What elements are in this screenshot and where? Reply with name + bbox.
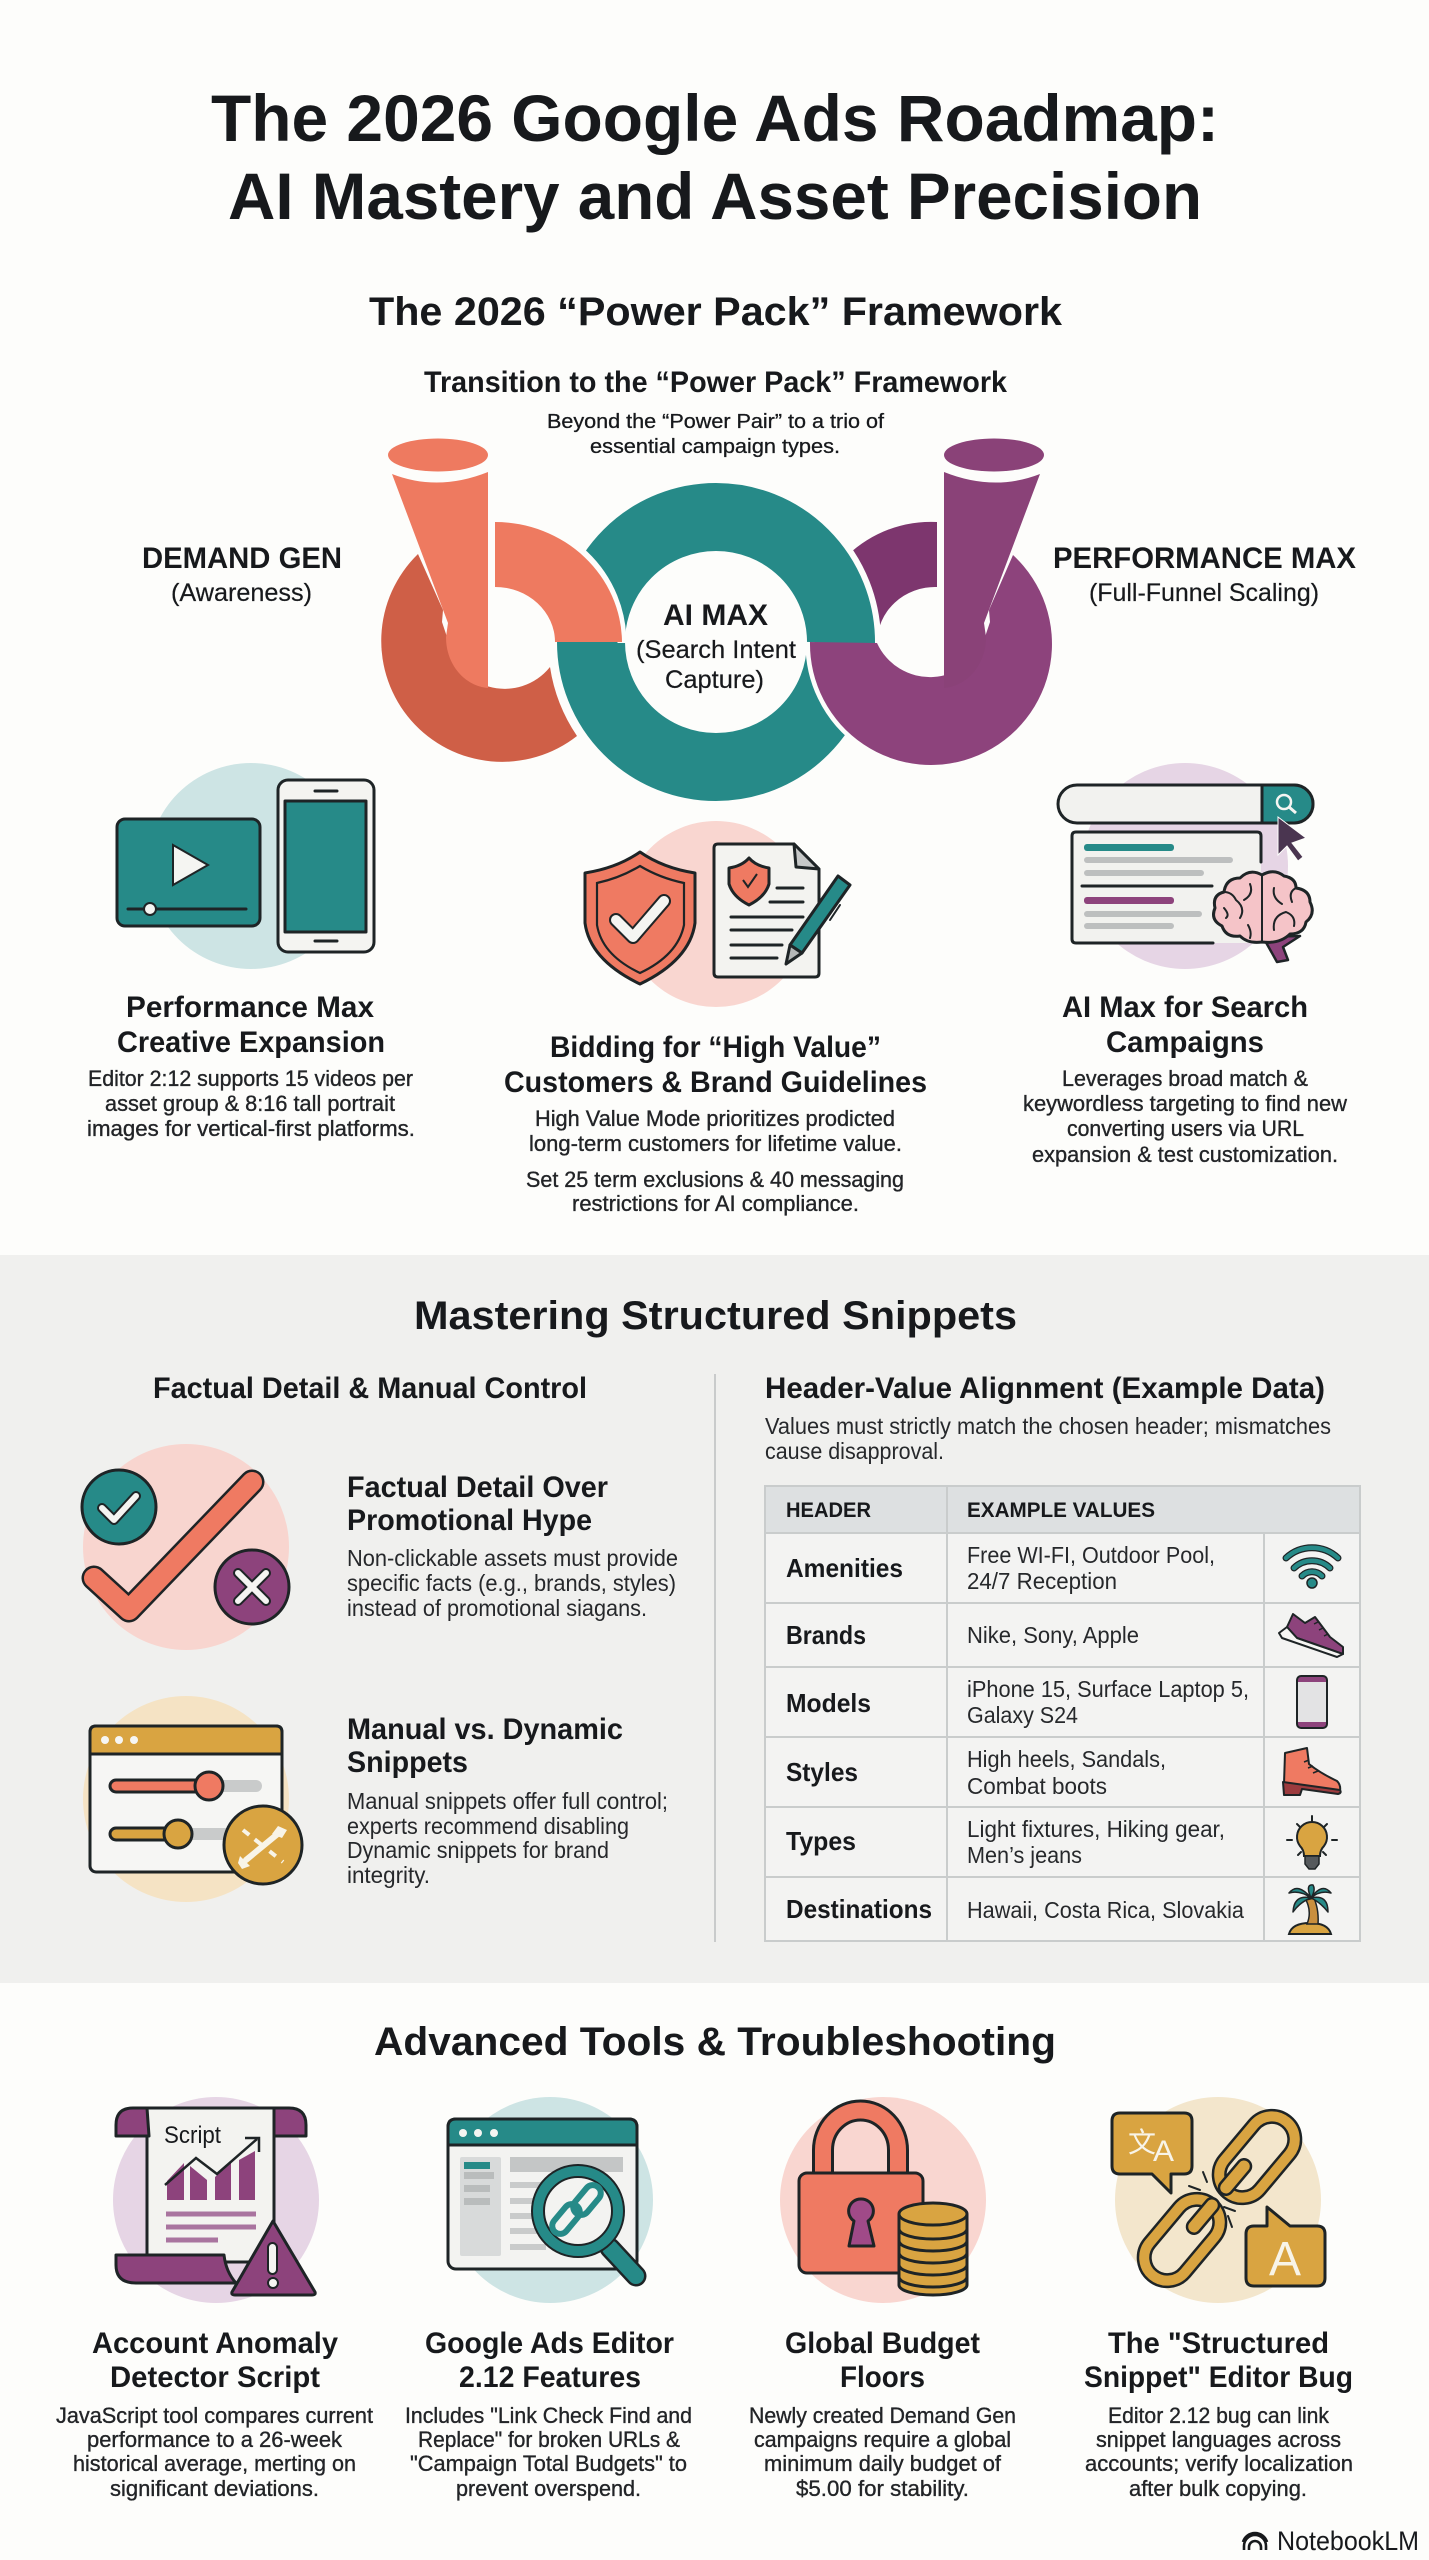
text: manual snippets: Dynamic snippets for brand bbox=[347, 1837, 609, 1863]
text: header value alignment bbox=[765, 1372, 1331, 1464]
item: factual detail over hype bbox=[82, 1444, 678, 1650]
table header row: EXAMPLE VALUES bbox=[967, 1499, 1155, 1522]
text: creative expansion: asset group & 8:16 tall portrait bbox=[105, 1091, 395, 1116]
text: editor bug: The "Structured bbox=[1108, 2327, 1329, 2360]
funnel: purple bbox=[944, 438, 1044, 688]
heading: structured snippets: Mastering Structured Snippets bbox=[414, 1294, 1017, 1338]
row: models: iPhone 15, Surface Laptop 5, bbox=[967, 1676, 1249, 1702]
text: AI max search: Campaigns bbox=[1106, 1026, 1264, 1059]
icon: boot bbox=[1283, 1748, 1341, 1795]
text: creative expansion bbox=[87, 991, 415, 1141]
icon: wifi bbox=[1286, 1548, 1338, 1588]
text: factual detail: Factual Detail Over bbox=[347, 1471, 608, 1504]
row: styles: Combat boots bbox=[967, 1773, 1107, 1799]
text: anomaly detector: historical average, merting on bbox=[73, 2451, 356, 2476]
text: editor features: 2.12 Features bbox=[459, 2361, 641, 2394]
label: AI max bbox=[636, 599, 796, 694]
subheading: factual detail: Factual Detail & Manual Control bbox=[153, 1372, 587, 1405]
text: budget floors: campaigns require a global bbox=[754, 2427, 1011, 2452]
card: bidding for high value bbox=[504, 821, 927, 1216]
text: anomaly detector: Detector Script bbox=[110, 2361, 320, 2394]
row: types: Men’s jeans bbox=[967, 1842, 1082, 1868]
text: anomaly detector: significant deviations. bbox=[110, 2476, 319, 2501]
icon: search bar and brain bbox=[1058, 763, 1313, 969]
icon: broken chain and translate bubbles: 文 bbox=[1128, 2127, 1156, 2158]
icon: light bulb bbox=[1287, 1816, 1337, 1869]
label: demand gen: DEMAND GEN bbox=[142, 542, 342, 575]
row: types bbox=[786, 1816, 1225, 1868]
icon: script scroll with warning bbox=[113, 2097, 319, 2303]
text: AI max search bbox=[1023, 991, 1347, 1167]
heading: advanced tools: Advanced Tools & Troubleshooting bbox=[374, 2020, 1056, 2064]
row: models: Galaxy S24 bbox=[967, 1702, 1078, 1728]
text: high value: Customers & Brand Guidelines bbox=[504, 1066, 927, 1099]
title bbox=[211, 81, 1219, 233]
table header row: HEADER bbox=[786, 1499, 871, 1522]
icon: browser with magnifier bbox=[447, 2097, 653, 2303]
text: manual snippets: experts recommend disabling bbox=[347, 1813, 629, 1839]
ring: coral upper bbox=[495, 522, 622, 643]
text: factual detail: specific facts (e.g., brands, styles) bbox=[347, 1570, 676, 1596]
row: amenities: Free WI-FI, Outdoor Pool, bbox=[967, 1542, 1215, 1568]
row: types: Light fixtures, Hiking gear, bbox=[967, 1816, 1225, 1842]
chart: interlocking power pack rings bbox=[381, 438, 1052, 767]
icon: shield and document bbox=[585, 821, 850, 1007]
text: high value: long-term customers for lifetime value. bbox=[529, 1131, 902, 1156]
card: AI max for search bbox=[1023, 763, 1347, 1167]
icon label: script: Script bbox=[164, 2122, 221, 2149]
icon: sneaker bbox=[1279, 1614, 1343, 1657]
table: header value examples bbox=[765, 1486, 1360, 1941]
text: anomaly detector: JavaScript tool compares current bbox=[56, 2403, 373, 2428]
text: manual snippets bbox=[347, 1713, 668, 1888]
row: styles bbox=[786, 1746, 1166, 1799]
text: creative expansion: Performance Max bbox=[126, 991, 374, 1024]
text: manual snippets: Manual vs. Dynamic bbox=[347, 1713, 623, 1746]
item: manual vs dynamic bbox=[83, 1696, 668, 1902]
row: styles: High heels, Sandals, bbox=[967, 1746, 1166, 1772]
text: header value alignment: Values must strictly match the chosen header; mismatches bbox=[765, 1413, 1331, 1439]
row: destinations: Destinations bbox=[786, 1894, 932, 1924]
text: high value: High Value Mode prioritizes prodicted bbox=[535, 1106, 895, 1131]
icon: phone bbox=[1297, 1676, 1327, 1728]
row: amenities: Amenities bbox=[786, 1553, 903, 1583]
icon: broken chain and translate bubbles: A bbox=[1153, 2135, 1174, 2168]
icon: broken chain and translate bubbles: A bbox=[1269, 2233, 1301, 2286]
card: anomaly detector bbox=[56, 2097, 373, 2501]
text: budget floors: $5.00 for stability. bbox=[796, 2476, 969, 2501]
logo: notebooklm: NotebookLM bbox=[1277, 2526, 1419, 2556]
ring: coral lower bbox=[381, 554, 577, 762]
subheading: transition: Beyond the “Power Pair” to a trio of bbox=[547, 411, 884, 433]
text: factual detail: Non-clickable assets must provide bbox=[347, 1545, 678, 1571]
text: editor bug: accounts; verify localization bbox=[1085, 2451, 1353, 2476]
row: styles: Styles bbox=[786, 1757, 858, 1787]
text: editor bug: Editor 2.12 bug can link bbox=[1108, 2403, 1330, 2428]
text: AI max search: keywordless targeting to find new bbox=[1023, 1091, 1347, 1116]
text: factual detail: instead of promotional siagans. bbox=[347, 1595, 647, 1621]
text: creative expansion: Editor 2:12 supports 15 videos per bbox=[88, 1066, 413, 1091]
card: structured snippet bug bbox=[1084, 2097, 1353, 2501]
text: editor bug: after bulk copying. bbox=[1129, 2476, 1307, 2501]
text: anomaly detector: performance to a 26-week bbox=[87, 2427, 343, 2452]
card: performance max creative expansion bbox=[87, 763, 415, 1141]
text: budget floors: Global Budget bbox=[785, 2327, 980, 2360]
text: editor bug bbox=[1084, 2327, 1353, 2501]
text: anomaly detector: Account Anomaly bbox=[92, 2327, 338, 2360]
text: header value alignment: Header-Value Alignment (Example Data) bbox=[765, 1372, 1325, 1405]
text: budget floors bbox=[749, 2327, 1016, 2501]
label: AI max: Capture) bbox=[665, 666, 764, 694]
subheading: transition bbox=[424, 366, 1007, 458]
row: models bbox=[786, 1676, 1249, 1728]
text: creative expansion: images for vertical-first platforms. bbox=[87, 1116, 415, 1141]
heading: power pack: The 2026 “Power Pack” Framework bbox=[369, 290, 1063, 334]
text: editor bug: snippet languages across bbox=[1096, 2427, 1341, 2452]
text: budget floors: Floors bbox=[840, 2361, 925, 2394]
text: AI max search: converting users via URL bbox=[1067, 1116, 1304, 1141]
text: factual detail bbox=[347, 1471, 678, 1621]
funnel: coral bbox=[388, 438, 488, 688]
text: creative expansion: Creative Expansion bbox=[117, 1026, 385, 1059]
text: AI max search: Leverages broad match & bbox=[1062, 1066, 1308, 1091]
title: The 2026 Google Ads Roadmap: bbox=[211, 81, 1219, 155]
text: manual snippets: integrity. bbox=[347, 1862, 430, 1888]
subheading: transition: essential campaign types. bbox=[590, 436, 840, 458]
label: performance max: (Full-Funnel Scaling) bbox=[1089, 579, 1319, 607]
panel: power pack framework bbox=[87, 290, 1356, 1216]
row: brands bbox=[786, 1620, 1139, 1650]
text: AI max search: AI Max for Search bbox=[1062, 991, 1308, 1024]
text: editor features: Includes "Link Check Find and bbox=[405, 2403, 692, 2428]
text: high value bbox=[504, 1031, 927, 1216]
label: demand gen: (Awareness) bbox=[171, 579, 312, 607]
text: editor bug: Snippet" Editor Bug bbox=[1084, 2361, 1353, 2394]
row: destinations bbox=[786, 1894, 1244, 1924]
text: high value: restrictions for AI compliance. bbox=[572, 1191, 859, 1216]
label: performance max: PERFORMANCE MAX bbox=[1053, 542, 1356, 575]
row: amenities: 24/7 Reception bbox=[967, 1568, 1117, 1594]
table header row bbox=[786, 1499, 1155, 1522]
icon: settings window bbox=[83, 1696, 302, 1902]
icon: check and cross bbox=[82, 1444, 289, 1650]
row: amenities bbox=[786, 1542, 1215, 1594]
text: budget floors: Newly created Demand Gen bbox=[749, 2403, 1016, 2428]
label: AI max: AI MAX bbox=[663, 599, 768, 632]
icon: padlock and coins bbox=[780, 2097, 986, 2303]
panel: advanced tools and troubleshooting bbox=[56, 2020, 1353, 2501]
text: header value alignment: cause disapproval. bbox=[765, 1438, 944, 1464]
text: high value: Bidding for “High Value” bbox=[550, 1031, 881, 1064]
text: manual snippets: Manual snippets offer full control; bbox=[347, 1788, 668, 1814]
text: factual detail: Promotional Hype bbox=[347, 1504, 592, 1537]
text: budget floors: minimum daily budget of bbox=[764, 2451, 1002, 2476]
card: global budget floors bbox=[749, 2097, 1016, 2501]
ring: purple lower bbox=[810, 555, 1052, 765]
icon: palm tree bbox=[1289, 1885, 1331, 1934]
label: AI max: (Search Intent bbox=[636, 636, 796, 664]
label: demand gen bbox=[142, 542, 342, 607]
row: brands: Nike, Sony, Apple bbox=[967, 1622, 1139, 1648]
card: ads editor features bbox=[405, 2097, 692, 2501]
text: editor features: "Campaign Total Budgets" to bbox=[410, 2451, 687, 2476]
text: manual snippets: Snippets bbox=[347, 1746, 468, 1779]
row: models: Models bbox=[786, 1688, 871, 1718]
text: high value: Set 25 term exclusions & 40 messaging bbox=[526, 1167, 904, 1192]
text: editor features: Google Ads Editor bbox=[425, 2327, 674, 2360]
text: anomaly detector bbox=[56, 2327, 373, 2501]
text: AI max search: expansion & test customization. bbox=[1032, 1142, 1338, 1167]
title: AI Mastery and Asset Precision bbox=[228, 159, 1202, 233]
subheading: transition: Transition to the “Power Pack” Framework bbox=[424, 366, 1007, 399]
text: editor features: Replace" for broken URLs & bbox=[418, 2427, 680, 2452]
ring: teal bbox=[591, 517, 841, 767]
text: editor features: prevent overspend. bbox=[456, 2476, 641, 2501]
icon: broken chain and translate bubbles bbox=[1112, 2097, 1325, 2303]
ring: purple upper bbox=[810, 522, 937, 643]
panel: mastering structured snippets bbox=[0, 1255, 1429, 1983]
icon: video and phone bbox=[117, 763, 374, 969]
row: brands: Brands bbox=[786, 1620, 866, 1650]
row: destinations: Hawaii, Costa Rica, Slovakia bbox=[967, 1897, 1244, 1923]
text: editor features bbox=[405, 2327, 692, 2501]
row: types: Types bbox=[786, 1826, 856, 1856]
label: performance max bbox=[1053, 542, 1356, 607]
